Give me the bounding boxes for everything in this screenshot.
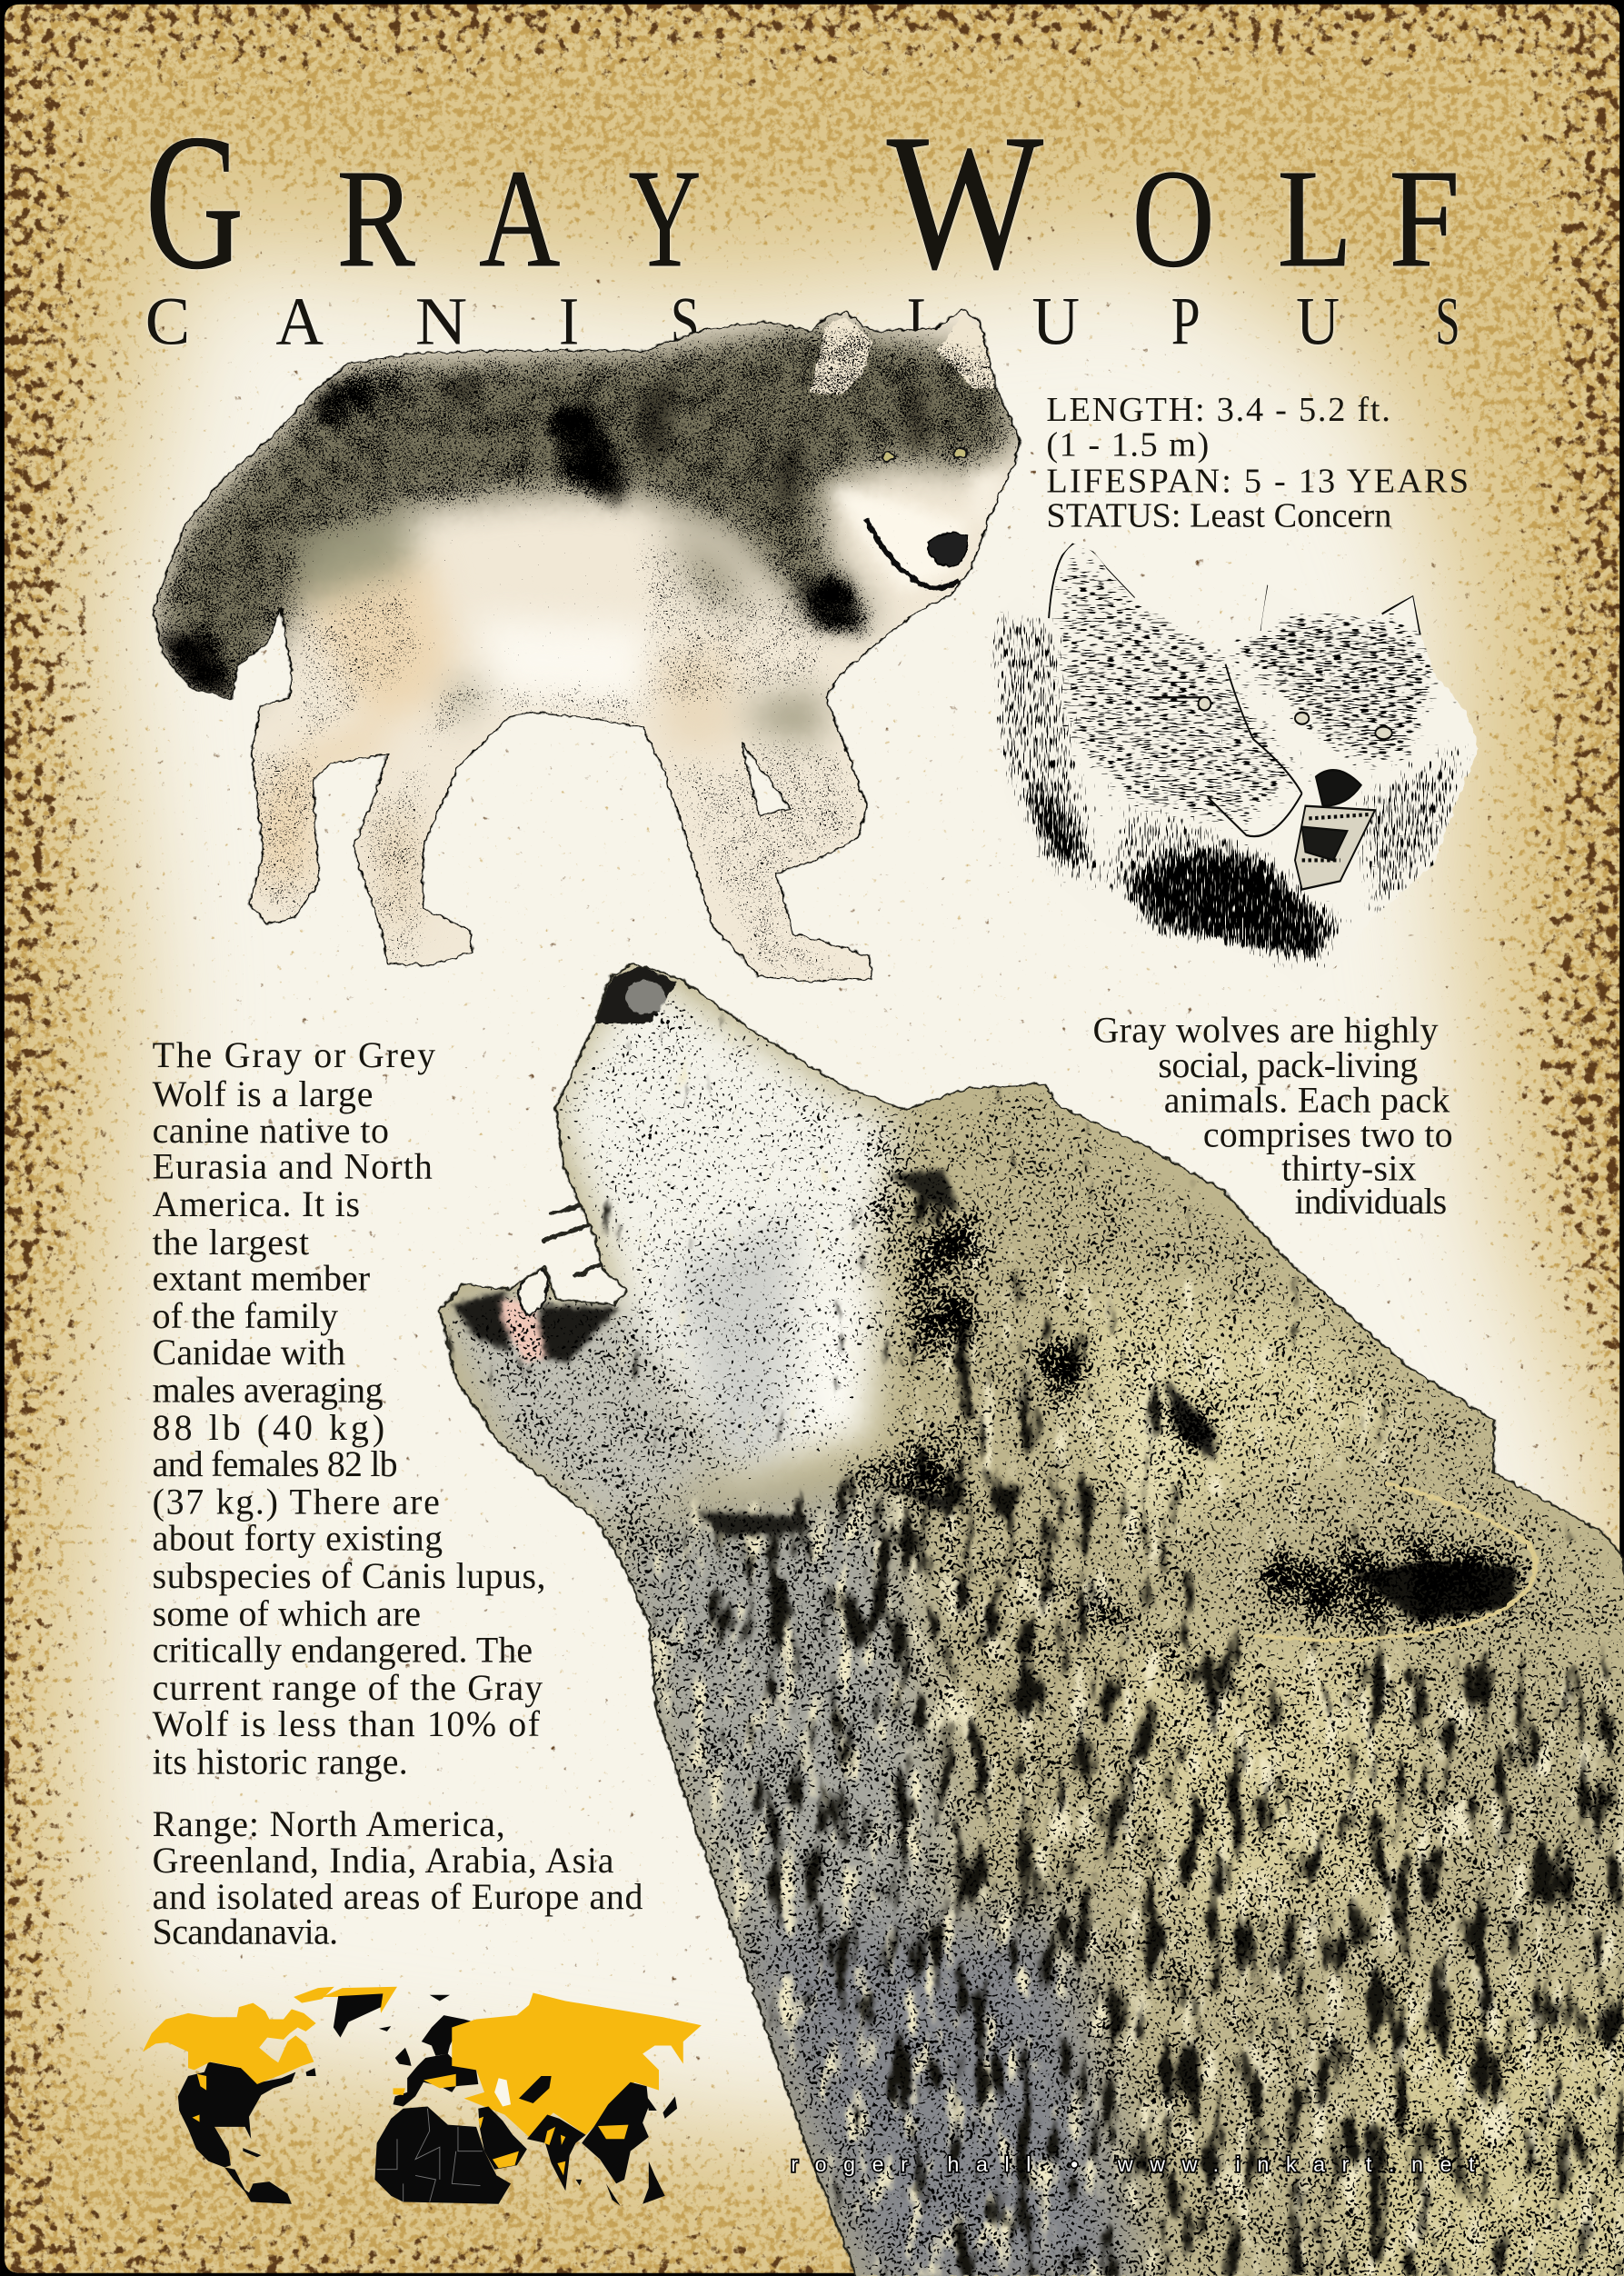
stats: length, lifespan, status: LIFESPAN: 5 - 13 YEARS	[1046, 462, 1469, 500]
text block: social behaviour: comprises two to	[1203, 1114, 1453, 1155]
text block: social behaviour: animals. Each pack	[1164, 1079, 1450, 1120]
map: Caspian and Kazakh gap	[494, 2078, 511, 2107]
stats: length, lifespan, status: LENGTH: 3.4 - 5.2 ft.	[1046, 391, 1390, 429]
title: Gray Wolf: O	[1132, 140, 1215, 296]
body text: species description: The Gray or Grey	[153, 1034, 435, 1075]
title: Gray Wolf	[145, 95, 1460, 310]
title: Gray Wolf: Y	[628, 140, 701, 296]
text block: range: and isolated areas of Europe and	[153, 1876, 643, 1917]
map: North America black	[178, 2061, 316, 2204]
map: Africa borders	[377, 2109, 483, 2201]
subtitle: Canis lupus	[145, 284, 1460, 359]
body text: species description	[153, 1034, 545, 1782]
body text: species description: the largest	[153, 1222, 309, 1263]
whiskers	[544, 1201, 623, 1276]
text block: range: Greenland, India, Arabia, Asia	[153, 1840, 614, 1881]
body text: species description: some of which are	[153, 1593, 421, 1634]
credit line: roger hall • www.inkart.net	[791, 2152, 1475, 2176]
body text: species description: Wolf is less than 10% of	[153, 1703, 541, 1744]
subtitle: Canis lupus: S	[1435, 284, 1460, 359]
title: Gray Wolf: F	[1389, 140, 1460, 296]
stats: length, lifespan, status: (1 - 1.5 m)	[1046, 425, 1209, 464]
text block: social behaviour: Gray wolves are highly	[1093, 1010, 1439, 1051]
title: Gray Wolf: L	[1277, 140, 1352, 296]
subtitle: Canis lupus: S	[671, 284, 700, 359]
subtitle: Canis lupus: I	[559, 284, 579, 359]
body text: species description: 88 lb (40 kg)	[153, 1407, 384, 1448]
title: Gray Wolf: R	[337, 140, 415, 296]
title: Gray Wolf: G	[145, 95, 244, 310]
text block: range	[153, 1803, 643, 1952]
subtitle: Canis lupus: C	[145, 284, 190, 359]
body text: species description: (37 kg.) There are	[153, 1482, 440, 1522]
wolf face details	[866, 448, 968, 588]
illustration: standing gray wolf	[151, 308, 1021, 983]
body text: species description: males averaging	[153, 1370, 384, 1411]
map: South and East Asia	[478, 2082, 677, 2206]
body text: species description: about forty existing	[153, 1518, 443, 1559]
body text: species description: of the family	[153, 1295, 338, 1336]
body text: species description: Wolf is a large	[153, 1073, 373, 1114]
subtitle: Canis lupus: U	[1031, 284, 1080, 359]
map: Europe	[379, 1995, 478, 2107]
text block: social behaviour	[1093, 1010, 1453, 1222]
text block: social behaviour: thirty-six	[1281, 1147, 1417, 1188]
map: North America range	[143, 1987, 334, 2121]
body text: species description: Eurasia and North	[153, 1146, 433, 1187]
title: Gray Wolf: A	[479, 140, 560, 296]
body text: species description: and females 82 lb	[153, 1443, 398, 1484]
body text: species description: Canidae with	[153, 1332, 345, 1373]
map: Greenland	[322, 1987, 397, 2013]
body text: species description: critically endangered. The	[153, 1629, 533, 1670]
stats: length, lifespan, status: STATUS: Least Concern	[1046, 497, 1391, 535]
body text: species description: canine native to	[153, 1110, 389, 1151]
range map	[143, 1987, 702, 2206]
body text: species description: America. It is	[153, 1183, 360, 1224]
text block: range: Scandanavia.	[153, 1911, 338, 1952]
map: Africa	[374, 2107, 511, 2204]
map: range bands	[394, 2074, 628, 2175]
map: Eurasia range	[452, 1993, 702, 2137]
subtitle: Canis lupus: L	[907, 284, 941, 359]
subtitle: Canis lupus: A	[275, 284, 324, 359]
illustration: howling wolf	[421, 943, 1624, 2276]
text block: range: Range: North America,	[153, 1803, 505, 1844]
body text: species description: extant member	[153, 1258, 370, 1299]
snarling wolf line details	[1049, 543, 1420, 890]
illustration: two wolves snarling	[989, 543, 1480, 990]
subtitle: Canis lupus: N	[415, 284, 467, 359]
stats: length, lifespan, status	[1046, 391, 1469, 535]
body text: species description: its historic range.	[153, 1741, 408, 1782]
howling wolf nose, ear and mouth details	[517, 966, 1536, 1640]
text block: social behaviour: individuals	[1294, 1181, 1447, 1222]
text block: social behaviour: social, pack-living	[1158, 1044, 1418, 1085]
body text: species description: current range of the Gray	[153, 1667, 543, 1708]
body text: species description: subspecies of Canis lupus,	[153, 1555, 545, 1596]
subtitle: Canis lupus: P	[1171, 284, 1201, 359]
wolf ears	[810, 315, 996, 394]
subtitle: Canis lupus: U	[1296, 284, 1340, 359]
title: Gray Wolf: W	[887, 95, 1043, 310]
